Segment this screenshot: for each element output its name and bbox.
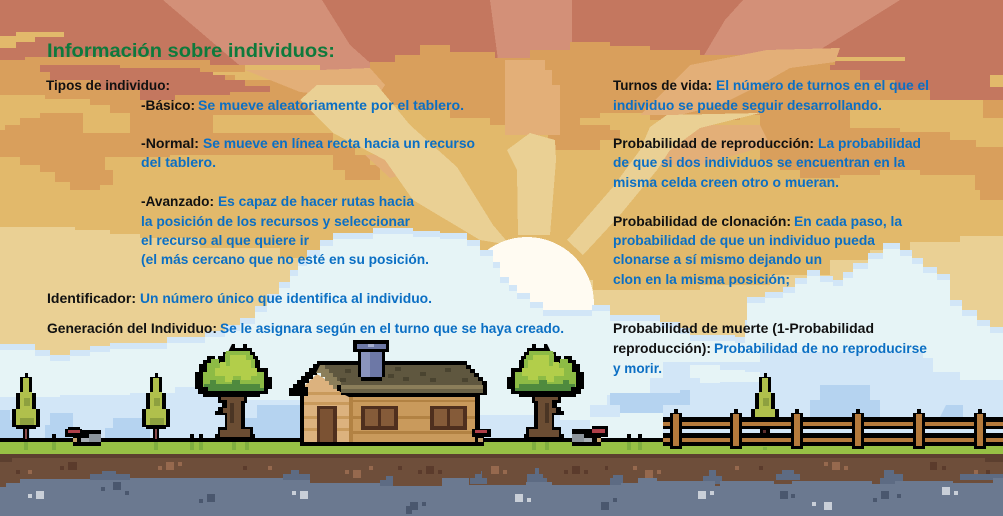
text block: tipos de individuo: la posición de los recursos y seleccionar: [141, 213, 411, 229]
text block: probabilidad de muerte: reproducción):: [613, 340, 711, 356]
text block: probabilidad de reproducción: [613, 135, 921, 190]
text block: generación: [47, 320, 564, 336]
door: [317, 406, 337, 442]
text block: tipos de individuo: del tablero.: [141, 154, 216, 170]
text block: tipos de individuo: Se mueve aleatoriamente por el tablero.: [198, 97, 464, 113]
icon: cypress tree 3 behind fence: [751, 373, 779, 450]
text block: turnos de vida: individuo se puede seguir desarrollando.: [613, 97, 882, 113]
icon: house: [289, 340, 487, 446]
icon: big tree left: [195, 344, 272, 439]
clouds: [0, 228, 1003, 450]
text block: turnos de vida: Turnos de vida:: [613, 77, 712, 93]
text block: tipos de individuo: Es capaz de hacer rutas hacia: [218, 193, 414, 209]
text block: probabilidad de reproducción: misma celda creen otro o mueran.: [613, 174, 839, 190]
text block: tipos de individuo: [46, 77, 475, 267]
text block: tipos de individuo: Se mueve en línea recta hacia un recurso: [203, 135, 475, 151]
text block: probabilidad de muerte: Probabilidad de muerte (1-Probabilidad: [613, 320, 874, 336]
icon: mushroom middle: [472, 429, 491, 446]
text block: tipos de individuo: -Avanzado:: [141, 193, 214, 209]
window right: [430, 406, 467, 430]
icon: grass tufts: [52, 434, 642, 450]
text block: tipos de individuo: -Básico:: [141, 97, 195, 113]
icon: cypress tree 1: [12, 373, 40, 450]
icon: big tree right: [507, 344, 584, 439]
text block: tipos de individuo: (el más cercano que no esté en su posición.: [141, 251, 429, 267]
text block: tipos de individuo: -Normal:: [141, 135, 199, 151]
text block: identificador: Un número único que identifica al individuo.: [140, 290, 432, 306]
fence: [663, 409, 1003, 449]
text block: generación: Generación del Individuo:: [47, 320, 217, 336]
sun rays: [300, 85, 510, 245]
roof: [289, 361, 487, 396]
icon: cypress tree 2: [142, 373, 170, 450]
text block: generación: Se le asignara según en el turno que se haya creado.: [220, 320, 564, 336]
sun: [460, 237, 594, 371]
text block: probabilidad de reproducción: La probabilidad: [818, 135, 921, 151]
icon: rock and mushroom right: [572, 426, 608, 446]
text block: probabilidad de muerte: [613, 320, 927, 376]
text block: probabilidad de clonación: En cada paso, la: [794, 213, 902, 229]
stone layer dark bumps: [90, 468, 1003, 486]
text block: probabilidad de clonación: probabilidad de que un individuo pueda: [613, 232, 875, 248]
text block: probabilidad de clonación: clonarse a sí mismo dejando un: [613, 251, 822, 267]
text block: probabilidad de muerte: Probabilidad de no reproducirse: [714, 340, 927, 356]
window left: [361, 406, 398, 430]
text block: probabilidad de reproducción: de que si dos individuos se encuentran en la: [613, 154, 905, 170]
text block: probabilidad de clonación: Probabilidad de clonación:: [613, 213, 791, 229]
text block: turnos de vida: [613, 77, 929, 113]
title: Información sobre individuos:: [47, 41, 335, 62]
chimney: [353, 340, 389, 381]
text block: probabilidad de reproducción: Probabilidad de reproducción:: [613, 135, 814, 151]
text block: turnos de vida: El número de turnos en el que el: [716, 77, 929, 93]
ground: [0, 438, 1003, 516]
text block: probabilidad de clonación: clon en la misma posición;: [613, 271, 790, 287]
icon: rock and mushroom left: [65, 427, 101, 446]
text block: probabilidad de muerte: y morir.: [613, 360, 662, 376]
text block: probabilidad de clonación: [613, 213, 902, 287]
text block: tipos de individuo: Tipos de individuo:: [46, 77, 170, 93]
text block: tipos de individuo: el recurso al que quiere ir: [141, 232, 310, 248]
text block: identificador: Identificador:: [47, 290, 136, 306]
